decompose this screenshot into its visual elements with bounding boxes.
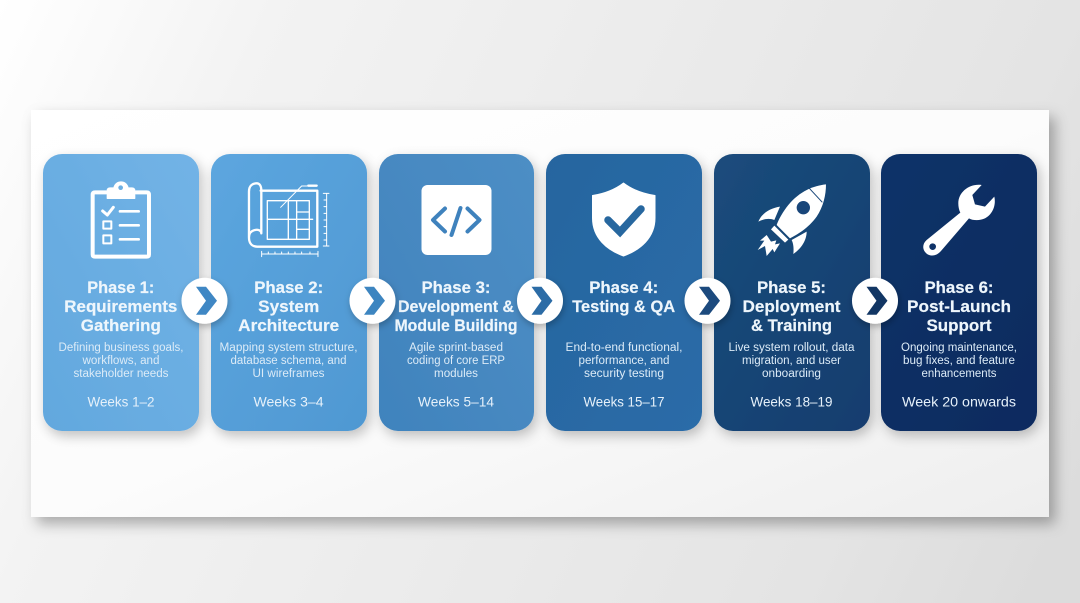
heading: phase 2: Architecture [238,316,339,335]
heading: phase 3: Module Building [394,316,518,335]
heading: phase 1: Requirements [64,297,177,316]
heading: phase 1: Phase 1: [87,278,154,297]
timing: phase 5: Weeks 18–19 [750,394,833,410]
heading: phase 5: Deployment [742,297,841,316]
heading: phase 5: & Training [751,316,832,335]
panel: phase 4 [546,154,702,431]
icon: blueprint [249,183,329,257]
description: phase 4: End-to-end functional, [566,342,682,354]
arrow: phase 4 to 5 [684,278,730,324]
description: phase 5: Live system rollout, data [728,342,855,354]
card background 4 [546,154,702,431]
timing: phase 3: Weeks 5–14 [418,394,494,410]
card background 3 [379,154,534,431]
card background 5 [714,154,870,431]
icon: clipboard [93,182,149,257]
heading: phase 1: Gathering [81,316,161,335]
description: phase 2: database schema, and [230,355,346,367]
description: phase 5: onboarding [762,368,821,380]
icon: rocket [758,184,826,256]
panel: phase 2 [211,154,367,431]
panel: phase 5 [714,154,870,431]
heading: phase 4: Phase 4: [589,278,658,297]
description: phase 1: Defining business goals, [58,342,184,354]
timing: phase 2: Weeks 3–4 [254,394,324,410]
heading: phase 6: Support [926,316,992,335]
heading: phase 6: Post-Launch [907,297,1011,316]
description: phase 4: performance, and [578,355,670,367]
arrow: phase 2 to 3 [350,278,396,324]
panel: phase 6 [881,154,1037,431]
description: phase 2: Mapping system structure, [220,342,358,354]
heading: phase 6: Phase 6: [924,278,994,297]
heading: phase 5: Phase 5: [757,278,826,297]
description: phase 1: stakeholder needs [74,368,169,380]
card background 2 [211,154,367,431]
heading: phase 4: Testing & QA [572,297,675,316]
panel: phase 3 [379,154,534,431]
timing: phase 6: Week 20 onwards [902,394,1016,410]
description: phase 3: Agile sprint-based [409,342,503,354]
panel: main white sheet [31,110,1049,517]
description: phase 6: enhancements [922,368,997,380]
arrow: phase 3 to 4 [517,278,563,324]
description: phase 6: Ongoing maintenance, [901,342,1017,354]
description: phase 4: security testing [584,368,664,380]
timing: phase 1: Weeks 1–2 [88,394,155,410]
icon: shield with check [592,183,655,256]
arrow: phase 5 to 6 [852,278,898,324]
heading: phase 3: Development & [398,297,514,316]
description: phase 5: migration, and user [742,355,841,367]
icon: wrench [923,185,995,256]
arrow: phase 1 to 2 [182,278,228,324]
description: phase 2: UI wireframes [252,368,325,380]
panel: phase 1 [43,154,199,431]
heading: phase 3: Phase 3: [422,278,490,297]
heading: phase 2: System [258,297,319,316]
heading: phase 2: Phase 2: [254,278,323,297]
timing: phase 4: Weeks 15–17 [584,394,665,410]
description: phase 6: bug fixes, and feature [903,355,1015,367]
card background 1 [43,154,199,431]
description: phase 3: modules [434,368,478,380]
icon: code window [422,185,492,255]
description: phase 1: workflows, and [81,355,160,367]
card background 6 [881,154,1037,431]
description: phase 3: coding of core ERP [407,355,505,367]
